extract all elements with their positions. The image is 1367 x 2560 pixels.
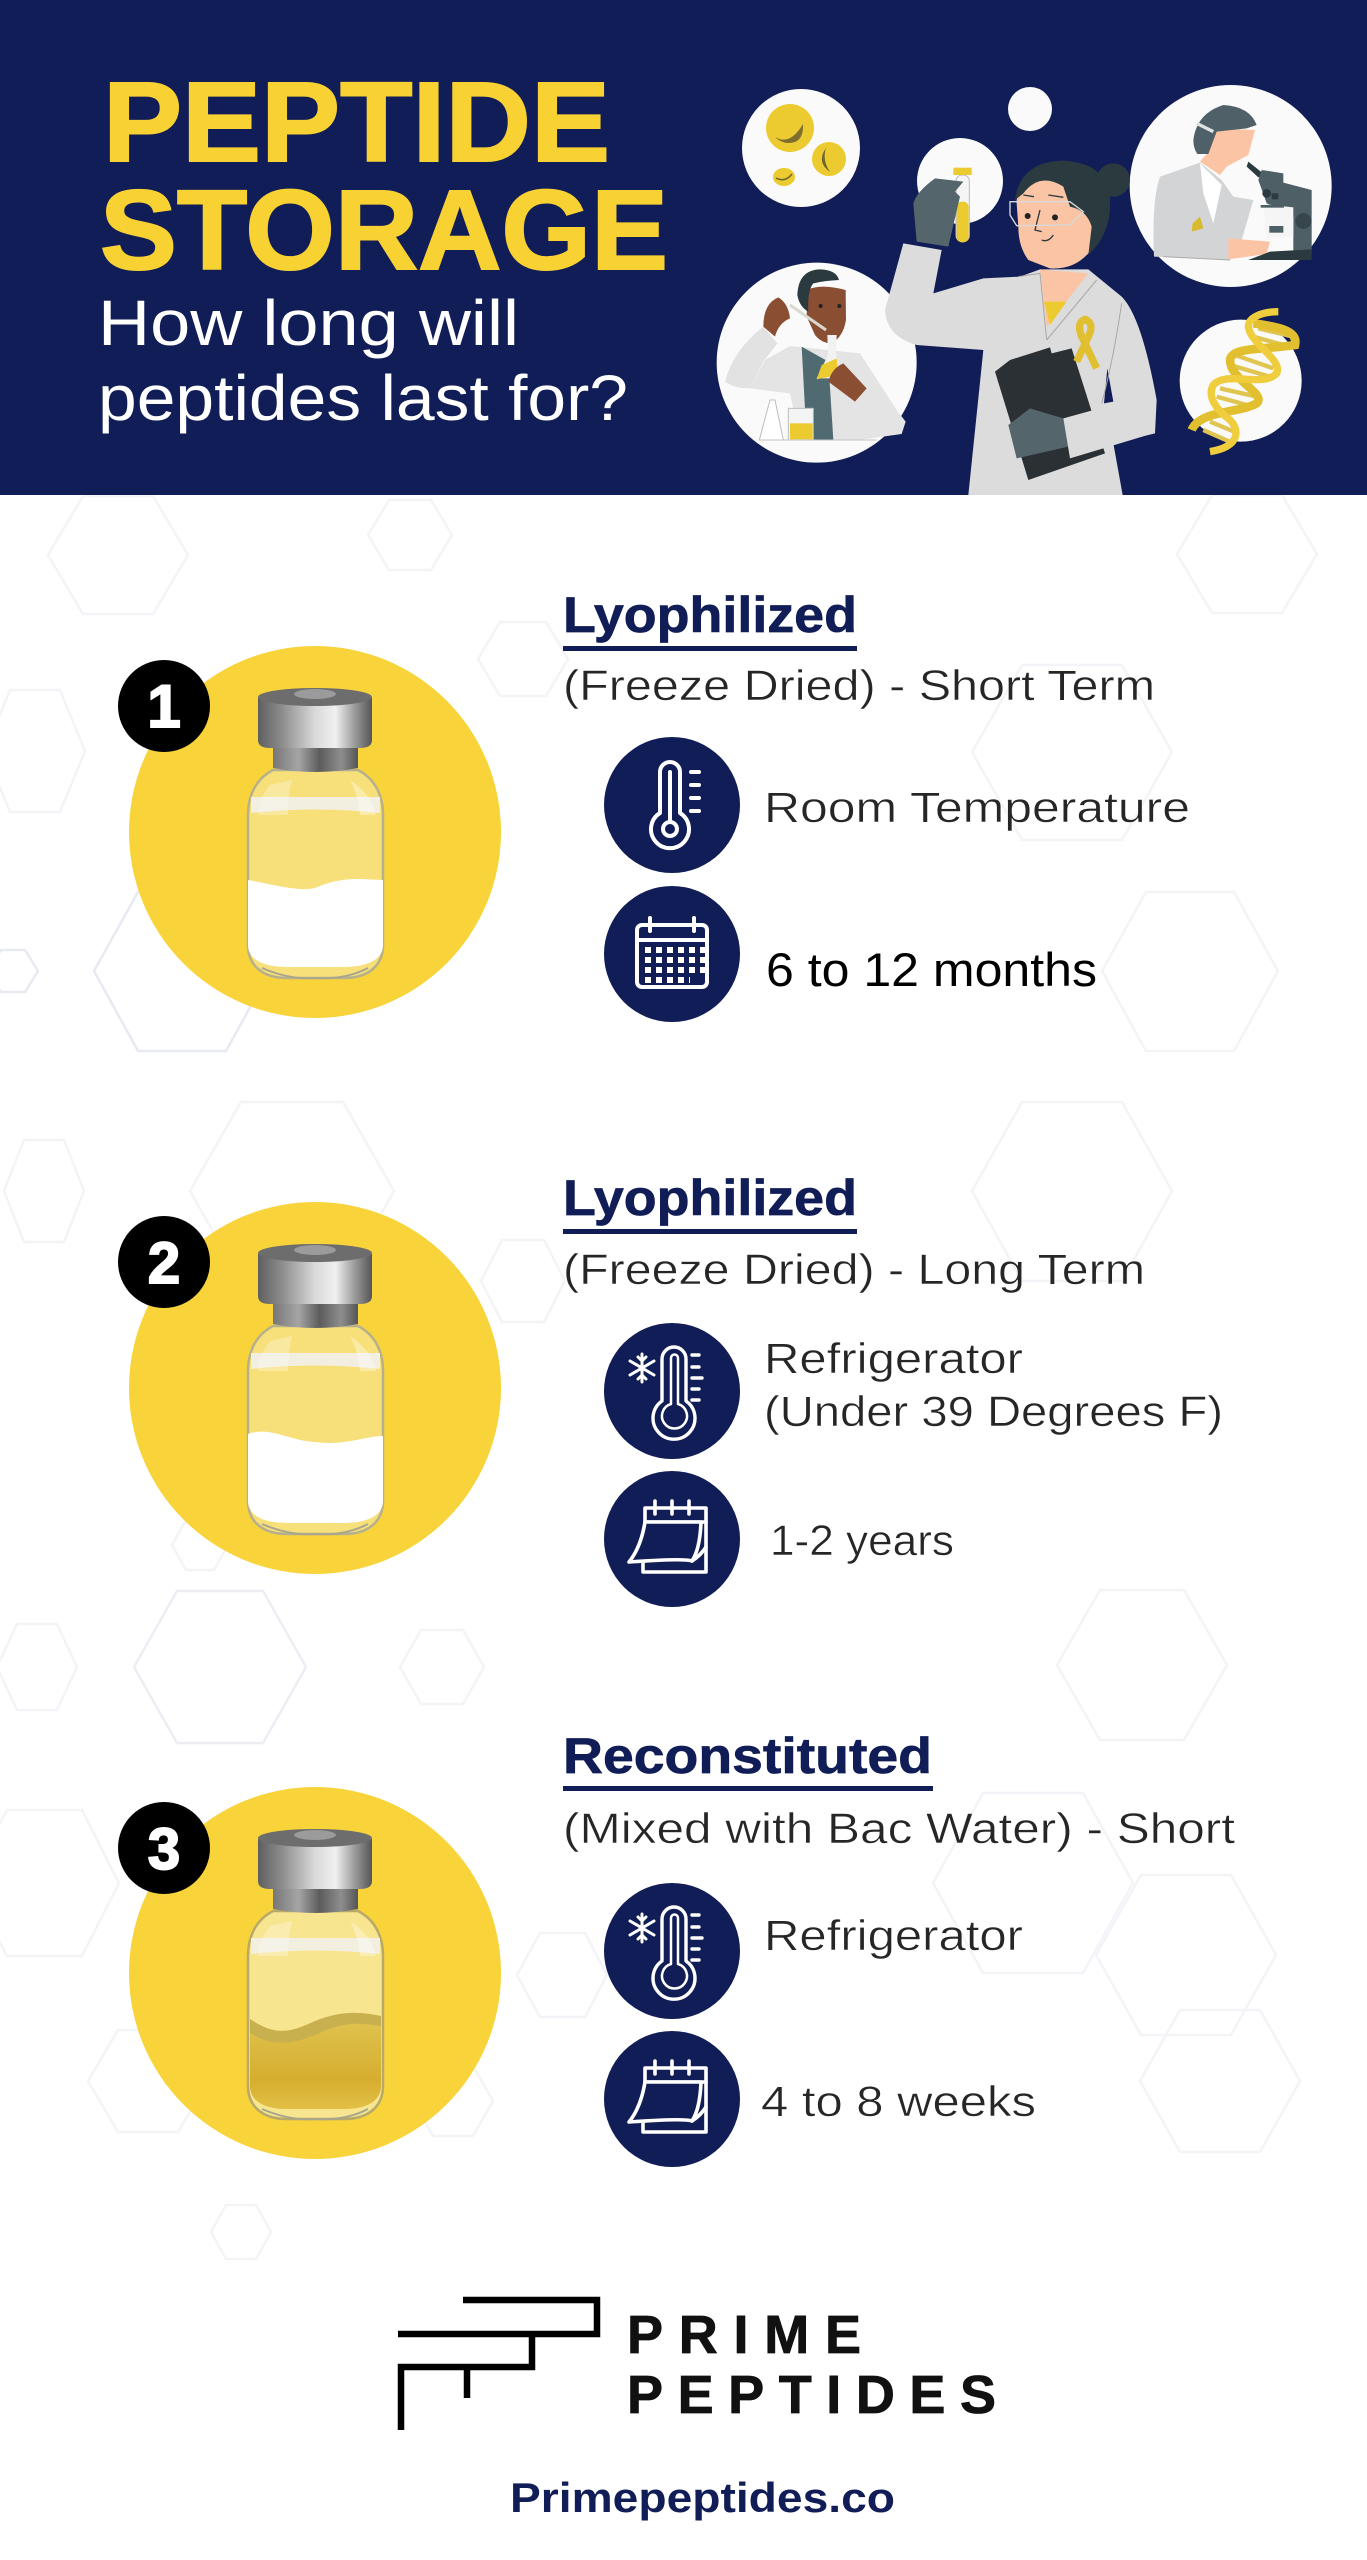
icon: calendar: [604, 886, 740, 1022]
website: Primepeptides.co: [510, 2474, 895, 2521]
section 1: [118, 587, 1190, 1022]
icon: thermometer: [604, 737, 740, 873]
icon: calendar page: [604, 1471, 740, 1607]
heading: Lyophilized: [563, 587, 857, 643]
number badge 3: [118, 1802, 210, 1894]
illustration: bubble with yellow cells: [742, 89, 860, 207]
duration label: 6 to 12 months: [766, 943, 1097, 996]
subheading: (Mixed with Bac Water) - Short: [563, 1805, 1235, 1853]
icon: refrigerator thermometer: [604, 1883, 740, 2019]
temperature label: (Under 39 Degrees F): [764, 1388, 1223, 1436]
footer logo: [398, 2300, 996, 2430]
yellow circle 1: [129, 646, 501, 1018]
subtitle: peptides last for?: [98, 362, 628, 434]
number badge 3: 3: [148, 1817, 180, 1882]
section 2: [118, 1170, 1223, 1607]
header banner: [0, 0, 1367, 495]
icon: refrigerator thermometer: [604, 1323, 740, 1459]
illustration: microscope scientist: [1130, 85, 1332, 287]
illustration: test tube bubble: [917, 138, 1003, 224]
illustration: small white bubble: [1008, 87, 1052, 131]
heading: Reconstituted: [563, 1728, 932, 1784]
subtitle: [98, 287, 628, 434]
temperature label: Refrigerator: [764, 1335, 1023, 1383]
vial: freeze dried long term: [248, 1244, 383, 1534]
duration label: 4 to 8 weeks: [761, 2078, 1036, 2126]
number badge 1: [118, 660, 210, 752]
logo wordmark: PEPTIDES: [627, 2365, 996, 2425]
vial: freeze dried short term: [248, 688, 383, 978]
section 3: [118, 1728, 1235, 2167]
vial: reconstituted: [248, 1829, 383, 2119]
icon: calendar page: [604, 2031, 740, 2167]
title: peptide storage: STORAGE: [100, 167, 668, 293]
illustration: main scientist: [885, 161, 1157, 495]
logo wordmark: PRIME: [627, 2305, 861, 2365]
temperature label: Refrigerator: [764, 1912, 1023, 1960]
background hexagon pattern: [0, 495, 1317, 2259]
heading: Lyophilized: [563, 1170, 857, 1226]
number badge 2: [118, 1216, 210, 1308]
subheading: (Freeze Dried) - Short Term: [563, 662, 1155, 710]
number badge 2: 2: [148, 1231, 180, 1296]
illustration: dna helix bubble: [1180, 312, 1302, 452]
temperature label: Room Temperature: [764, 784, 1190, 832]
logo wordmark: [627, 2305, 996, 2425]
yellow circle 2: [129, 1202, 501, 1574]
subheading: (Freeze Dried) - Long Term: [563, 1246, 1145, 1294]
duration label: 1-2 years: [770, 1517, 954, 1565]
temperature label: [764, 1335, 1223, 1436]
title: peptide storage: [100, 59, 668, 293]
number badge 1: 1: [147, 673, 181, 740]
logo mark: [398, 2300, 597, 2430]
subtitle: How long will: [98, 287, 519, 359]
illustration: scientist with pipette: [717, 263, 917, 463]
yellow circle 3: [129, 1787, 501, 2159]
title: peptide storage: PEPTIDE: [103, 59, 610, 185]
